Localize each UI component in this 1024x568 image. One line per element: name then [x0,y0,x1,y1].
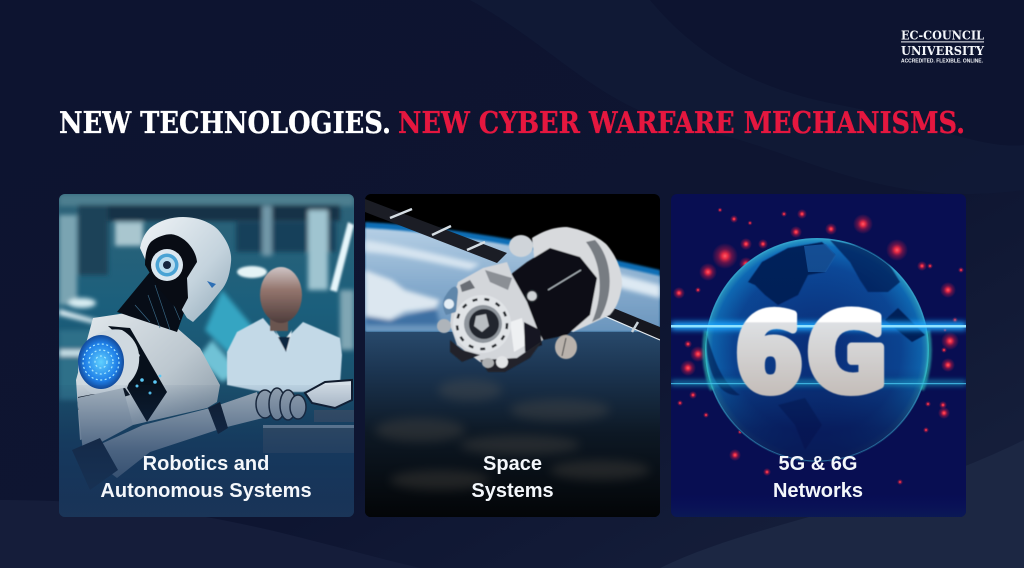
logo: EC-Council University: ACCREDITED. FLEXIBLE. ONLINE. [901,58,983,64]
robot shoulder with blue light [78,329,139,394]
caption: Robotics and [143,453,269,475]
docking ring [453,295,511,353]
horizontal light beams [671,322,966,385]
globe lower dimming [705,278,929,462]
land clouds [375,379,650,490]
panel: space systems [365,194,660,517]
robot ear sensor [151,249,183,281]
title [59,106,965,141]
globe [705,238,929,462]
red particles [673,208,964,485]
panel: robotics and autonomous systems [59,194,354,517]
clouds [365,240,660,325]
panel: 5G and 6G networks [671,194,966,517]
title: NEW TECHNOLOGIES. [59,106,391,141]
robot head [140,217,231,322]
continents [705,240,925,450]
6G large lettering: 6G [735,292,887,416]
caption: Autonomous Systems [100,480,312,502]
robot neck wires [117,272,190,332]
logo: EC-Council University [901,28,985,64]
caption [774,456,862,497]
keyboard desk [314,410,354,422]
robot torso [76,312,220,440]
logo: EC-Council University: EC-COUNCIL [901,28,985,42]
earth limb [365,222,660,332]
caption: Systems [471,480,554,502]
caption: Networks [773,480,863,502]
caption: 5G & 6G [779,453,857,475]
factory background [59,194,354,400]
spacecraft [437,227,622,372]
navy caption gradient [59,385,354,517]
logo: EC-Council University: UNIVERSITY [901,43,985,58]
left solar panel [365,199,507,263]
teal rim glow [704,330,930,390]
scientist in lab coat [227,267,342,392]
dark lower atmosphere [365,332,660,517]
right solar panel [604,308,660,340]
caption [471,453,554,502]
caption [100,453,312,502]
robot arm and hand [77,388,133,446]
caption: Space [483,453,542,475]
robot dark seam [108,326,167,422]
